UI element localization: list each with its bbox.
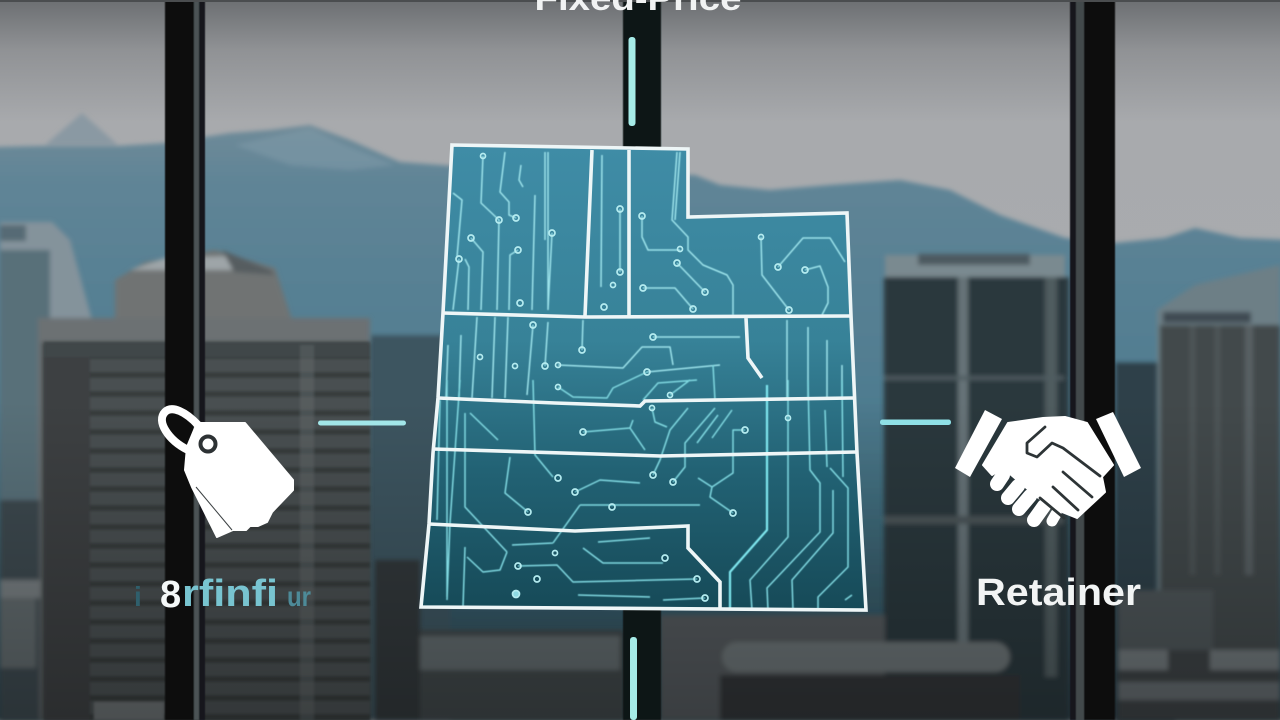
label: left pricing model: 8 — [160, 574, 181, 616]
label: left pricing model — [134, 573, 311, 616]
window of building stripes — [44, 342, 370, 720]
connector: right — [880, 420, 951, 425]
circuit nodes — [456, 154, 808, 601]
icon: price tag — [162, 409, 293, 537]
icon: handshake — [955, 410, 1141, 521]
map region borders — [421, 145, 866, 610]
circuit traces — [437, 152, 852, 610]
label: left pricing model: i — [134, 581, 142, 612]
label: Retainer: Retainer — [976, 572, 1141, 614]
panel: circuit map of Utah — [421, 145, 866, 610]
window mullions — [165, 0, 1115, 720]
connector: top — [628, 37, 636, 126]
connector: bottom — [630, 637, 637, 720]
label: left pricing model: rfinfi — [182, 573, 278, 615]
label: left pricing model: ur — [287, 581, 311, 612]
connector: left — [318, 420, 406, 426]
